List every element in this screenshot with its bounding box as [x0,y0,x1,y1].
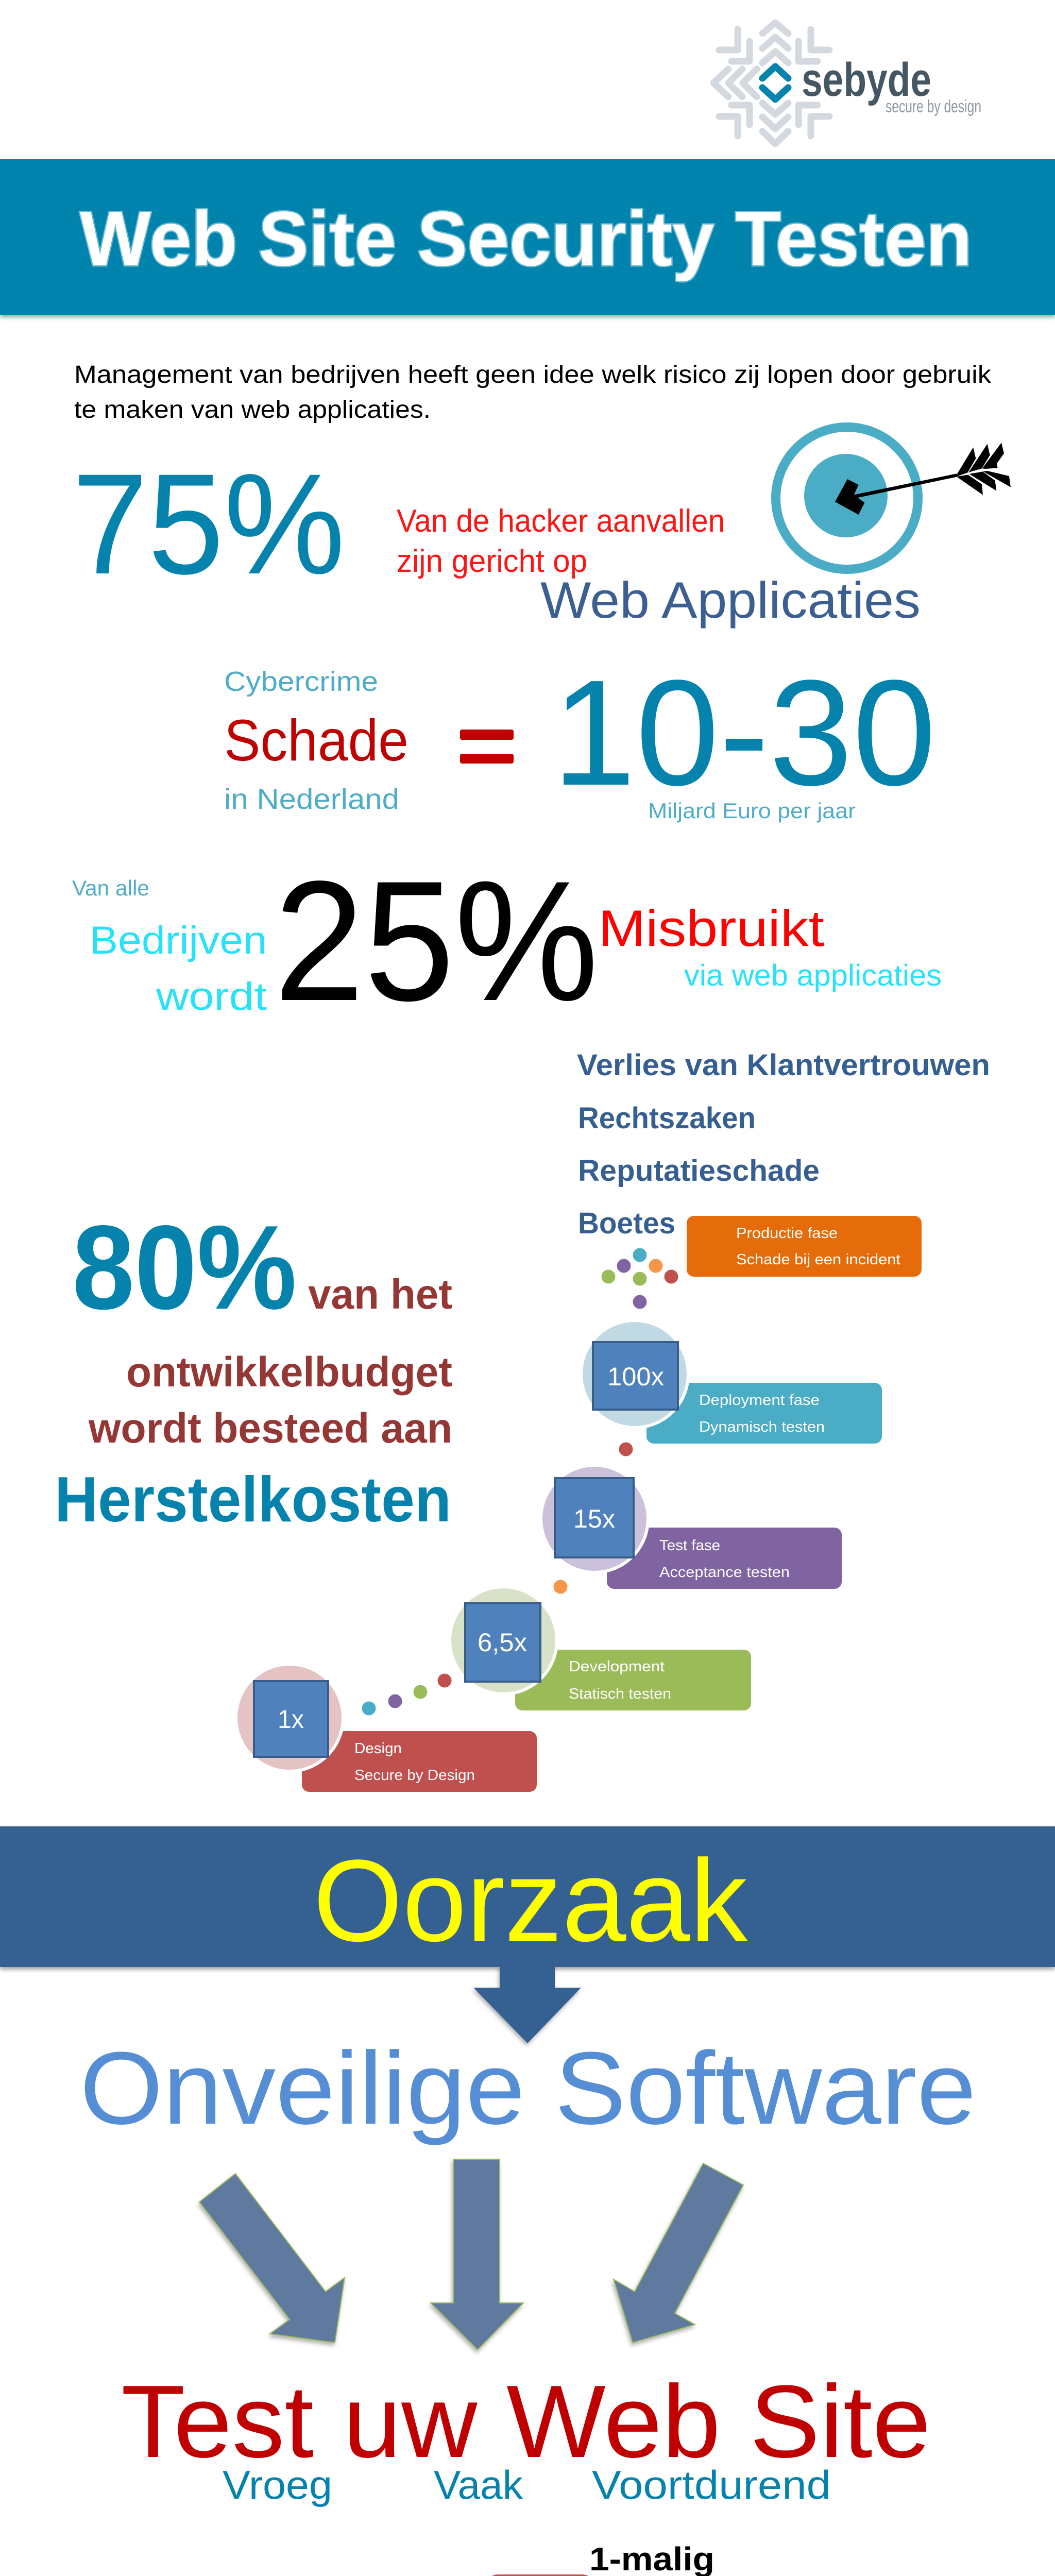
text: hacker attacks [397,503,725,579]
step: 6,5x development: Development [569,1658,665,1675]
text: Bedrijven wordt: Bedrijven [90,919,267,962]
step: 100x deployment [581,1320,882,1444]
text: 80% van het ontwikkelbudget wordt besteed aan Herstelkosten: van het [308,1271,452,1318]
text: hacker attacks: zijn gericht op [397,544,587,579]
text: in Nederland: in Nederland [224,783,399,815]
labels: Vroeg Vaak Voortdurend: Vroeg [223,2462,332,2507]
step: 6,5x development [450,1587,751,1710]
text: 80% van het ontwikkelbudget wordt besteed aan Herstelkosten: 80% [72,1201,297,1334]
step: 1x design: Design [354,1740,402,1757]
text: 80% van het ontwikkelbudget wordt besteed aan Herstelkosten: wordt besteed aan [88,1405,452,1452]
heading: Web Applicaties: Web Applicaties [540,571,921,629]
step: 100x deployment: Deployment fase [699,1392,820,1409]
title banner: Web Site Security Testen [80,195,972,282]
stat: 25%: 25% [274,845,599,1037]
dot: red [619,1443,633,1456]
text: Cybercrime: Cybercrime [224,666,378,697]
labels: Vroeg Vaak Voortdurend: Voortdurend [592,2462,831,2507]
logo: sebyde [713,23,981,144]
text: Miljard Euro per jaar: Miljard Euro per jaar [648,799,856,823]
text: via web applicaties: via web applicaties [684,959,942,992]
step: 15x test [541,1465,842,1589]
dot: orange [553,1580,568,1594]
step: 6,5x development: 6,5x [478,1628,527,1657]
title banner [0,159,1055,315]
arrow: down from Oorzaak [473,1965,581,2043]
step: 15x test: Test fase [659,1537,720,1554]
text: hacker attacks: Van de hacker aanvallen [397,503,725,539]
list: consequences [577,1048,990,1240]
equals sign [460,730,514,764]
step: 100x deployment: Dynamisch testen [699,1419,825,1435]
intro text [74,361,992,423]
heading: Onveilige Software: Onveilige Software [80,2031,976,2146]
list: consequences: Rechtszaken [578,1101,756,1135]
label: Productie fase: Schade bij een incident [736,1251,900,1268]
intro text: te maken van web applicaties. [74,396,431,423]
list: consequences: Verlies van Klantvertrouwen [577,1048,990,1082]
label: Productie fase: Productie fase [736,1225,838,1242]
icon: target with arrow [776,427,1011,569]
text: 80% van het ontwikkelbudget wordt besteed aan Herstelkosten: Herstelkosten [55,1464,451,1535]
step: 1x design: 1x [278,1705,304,1734]
banner: Oorzaak: Oorzaak [313,1835,748,1965]
logo: sebyde: secure by design [886,97,981,116]
text: Bedrijven wordt [90,919,267,1019]
heading: Test uw Web Site: Test uw Web Site [121,2364,931,2479]
text: Misbruikt: Misbruikt [599,900,824,957]
text: 80% van het ontwikkelbudget wordt besteed aan Herstelkosten [55,1201,452,1535]
step: 15x test: Acceptance testen [659,1564,790,1581]
stat: 10-30: 10-30 [552,649,936,817]
banner: Oorzaak [0,1826,1055,1967]
stat: 75%: 75% [72,444,345,604]
step: 100x deployment: 100x [607,1362,664,1391]
step: 15x test: 15x [573,1504,615,1533]
step: 1x design [236,1664,537,1792]
labels: Vroeg Vaak Voortdurend: Vaak [434,2462,523,2507]
arrows: three pointing to test [199,2159,743,2350]
dots between steps [362,1673,451,1716]
cycle diagram [364,2574,717,2576]
decorative dots cluster [602,1248,678,1309]
list: consequences: Boetes [578,1207,675,1240]
text: Van alle: Van alle [72,876,149,900]
step: 6,5x development: Statisch testen [569,1686,671,1702]
labels: Vroeg Vaak Voortdurend [223,2462,831,2507]
text: 80% van het ontwikkelbudget wordt besteed aan Herstelkosten: ontwikkelbudget [126,1349,452,1396]
step: 1x design: Secure by Design [354,1767,475,1784]
list: consequences: Reputatieschade [578,1154,820,1188]
logo: sebyde: sebyde [802,54,931,106]
box: Controleer [485,2574,595,2576]
text: Schade: Schade [224,708,409,773]
intro text: Management van bedrijven heeft geen idee welk risico zij lopen door gebruik [74,361,992,388]
text: Bedrijven wordt: wordt [156,975,267,1019]
label: Productie fase [687,1216,922,1277]
